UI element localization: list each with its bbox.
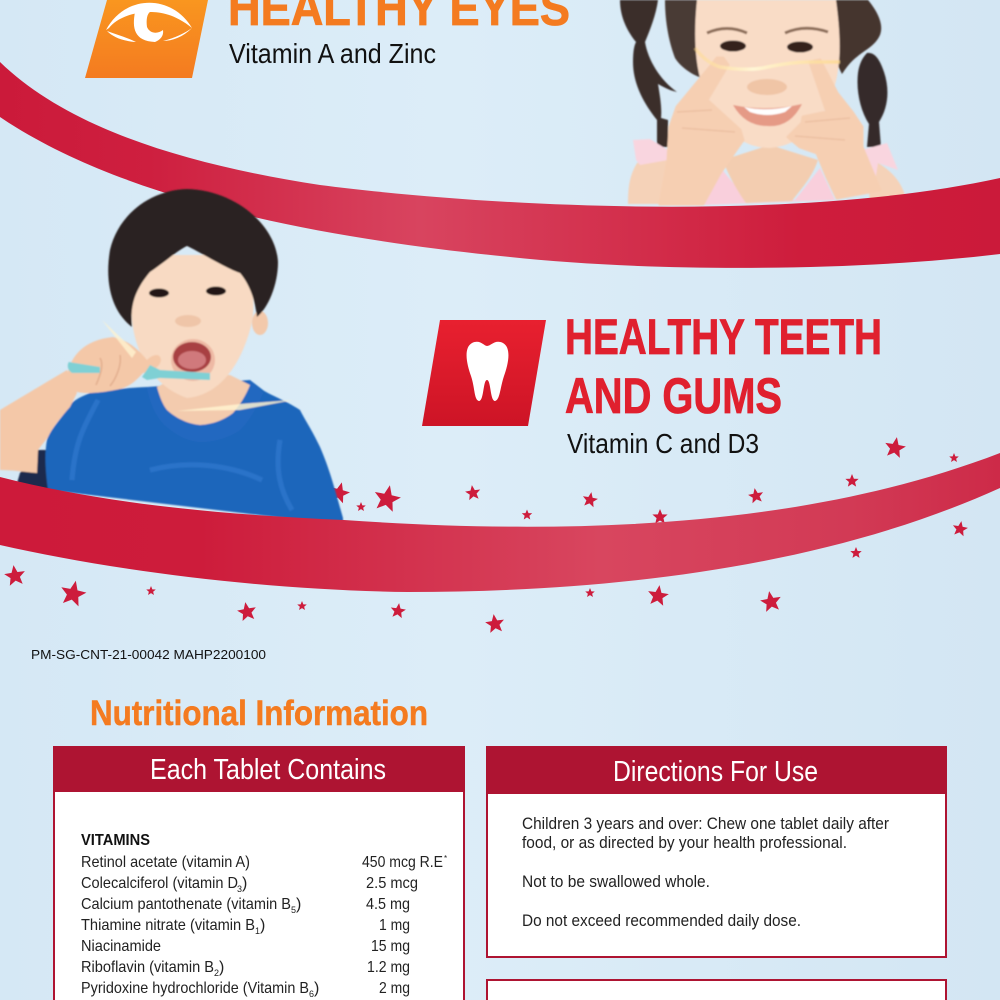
directions text: Children 3 years and over: Chew one tablet daily after (522, 814, 889, 833)
vitamins section label: VITAMINS (81, 832, 150, 849)
heading: nutritional information: Nutritional Information (90, 694, 428, 733)
panel: each tablet contains (53, 746, 465, 1000)
vitamins table: ) (260, 917, 265, 934)
vitamins table: Retinol acetate (vitamin A) (81, 854, 250, 871)
title: healthy teeth: HEALTHY TEETH (565, 309, 882, 365)
panel: next section (cropped) (487, 980, 946, 1000)
ribbon: lower red wave (0, 453, 1000, 592)
vitamins table: 1 mg (379, 917, 410, 934)
photo: girl pointing at eyes (620, 0, 905, 205)
vitamins table: Pyridoxine hydrochloride (Vitamin B (81, 980, 309, 997)
panel: directions for use (486, 746, 947, 957)
vitamins table: Colecalciferol (vitamin D (81, 875, 238, 892)
vitamins table: Riboflavin (vitamin B (81, 959, 214, 976)
photo: boy brushing teeth (0, 189, 343, 525)
panel header (486, 746, 947, 794)
directions text: Do not exceed recommended daily dose. (522, 911, 801, 930)
icon: eye on orange badge (85, 0, 208, 78)
directions text: food, or as directed by your health professional. (522, 833, 847, 852)
ribbon: upper red wave (0, 62, 1000, 268)
directions text (522, 814, 889, 930)
subtitle: vitamin a and zinc: Vitamin A and Zinc (229, 38, 436, 69)
panel title: Directions For Use (613, 756, 818, 788)
panel header (53, 746, 465, 792)
vitamins table: 5 (291, 905, 296, 915)
title: and gums: AND GUMS (565, 368, 782, 424)
heading: healthy eyes (85, 0, 570, 78)
vitamins table: 15 mg (371, 938, 410, 955)
vitamins table: 6 (309, 989, 314, 999)
vitamins table: 4.5 mg (366, 896, 410, 913)
icon: tooth on red badge (422, 320, 546, 426)
vitamins table: 1.2 mg (367, 959, 410, 976)
vitamins table: 2 mg (379, 980, 410, 997)
vitamins table (81, 854, 447, 999)
vitamins table: 450 mcg R.E (362, 854, 443, 871)
directions text: Not to be swallowed whole. (522, 872, 710, 891)
vitamins table: ) (242, 875, 247, 892)
vitamins table: 2 (214, 968, 219, 978)
vitamins table: ) (219, 959, 224, 976)
vitamins table: ) (296, 896, 301, 913)
decorative red stars (3, 435, 969, 633)
vitamins table: * (444, 854, 447, 863)
panel title: Each Tablet Contains (150, 754, 386, 786)
vitamins table: Calcium pantothenate (vitamin B (81, 896, 291, 913)
vitamins table: 3 (237, 884, 242, 894)
subtitle: vitamin c and d3: Vitamin C and D3 (567, 428, 759, 459)
vitamins table: 1 (255, 926, 260, 936)
product code: PM-SG-CNT-21-00042 MAHP2200100 (31, 647, 266, 662)
vitamins table: 2.5 mcg (366, 875, 418, 892)
heading: healthy teeth and gums (422, 309, 882, 459)
vitamins table: Thiamine nitrate (vitamin B (81, 917, 255, 934)
vitamins table: ) (314, 980, 319, 997)
vitamins table: Niacinamide (81, 938, 161, 955)
